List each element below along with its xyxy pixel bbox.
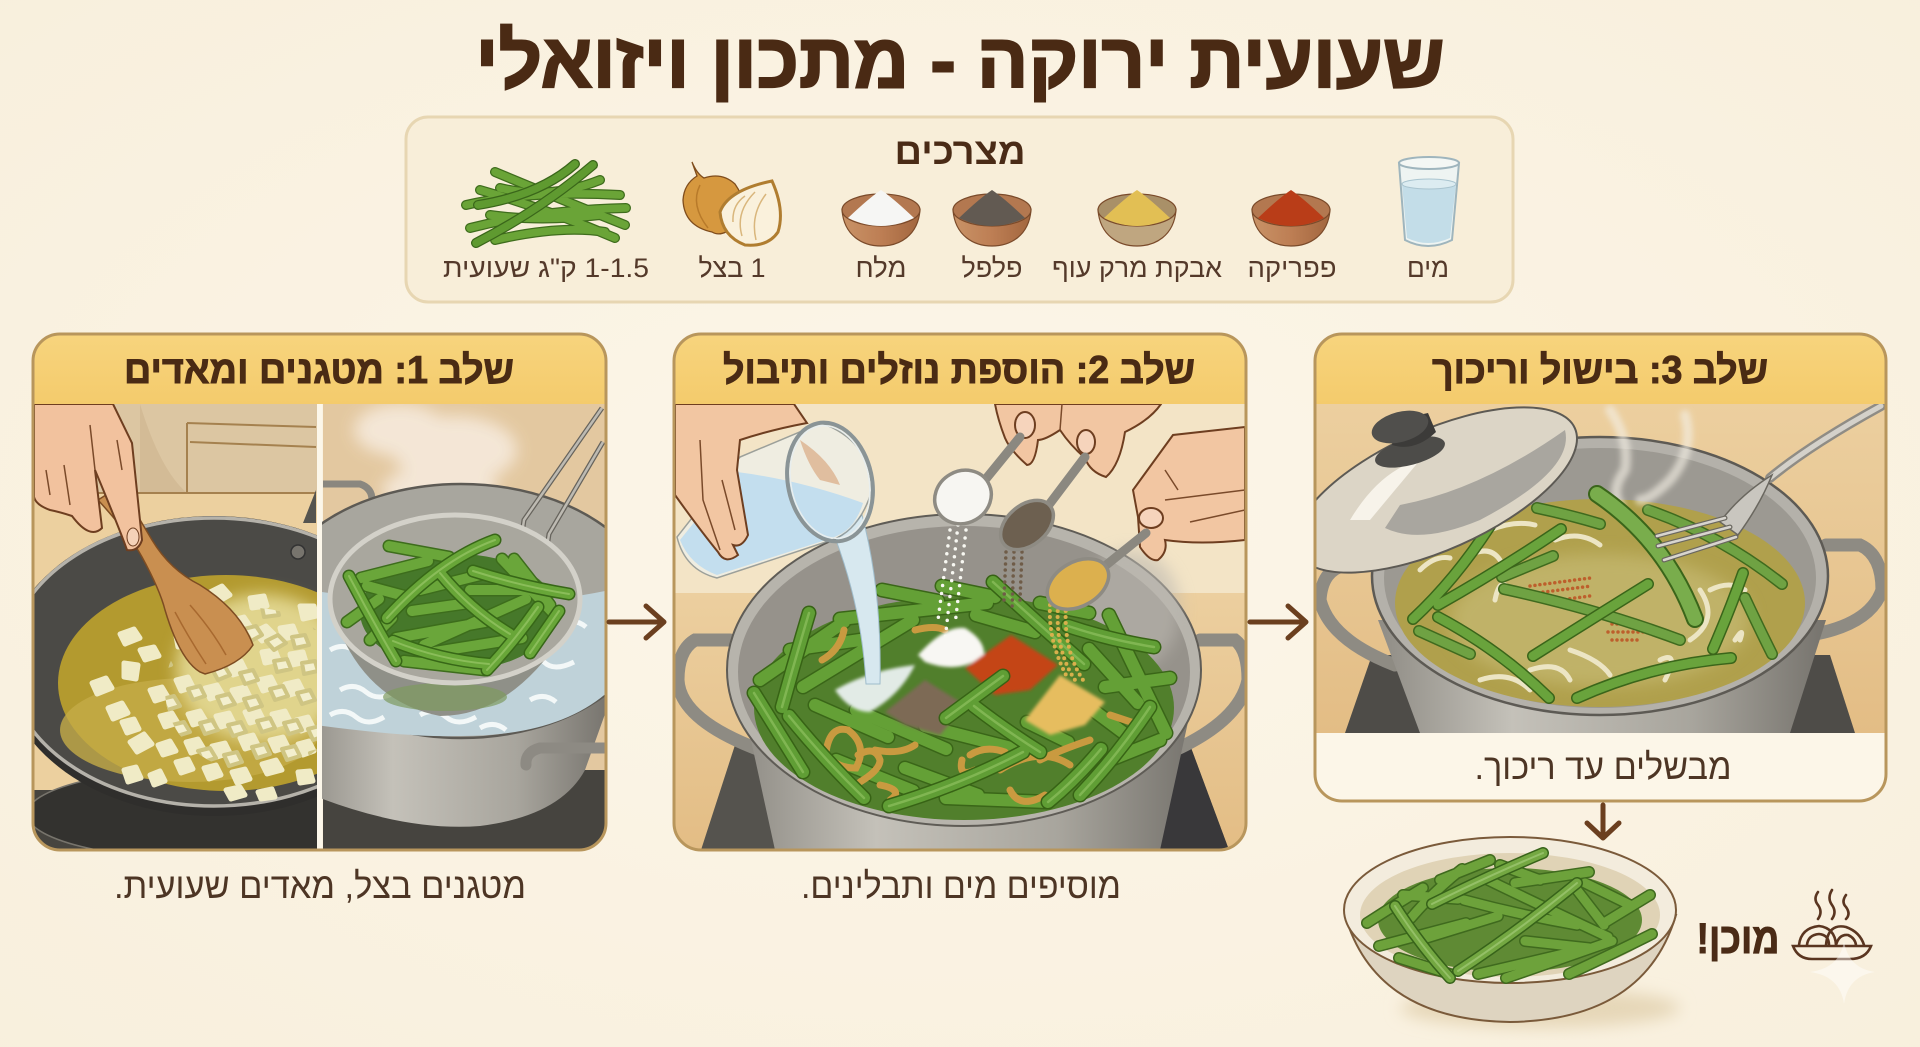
spoons	[925, 437, 1146, 620]
ingredient labels: מלח	[856, 253, 906, 283]
hand: left holding glass	[675, 404, 807, 559]
pan handle stub	[303, 490, 316, 523]
ingredient labels	[443, 253, 1449, 283]
illustration: cooking pot	[1316, 404, 1884, 733]
hand: right holding spoon	[1133, 427, 1245, 560]
denser onion cluster	[165, 608, 317, 768]
illustration: steaming beans	[322, 404, 604, 848]
step 1 border	[33, 334, 606, 850]
step 2 caption: מוסיפים מים ותבלינים.	[801, 865, 1121, 906]
ingredient: green beans	[466, 164, 626, 243]
right pot handle	[526, 748, 607, 765]
step 1 header bar	[34, 335, 605, 404]
ingredient labels: מים	[1407, 253, 1449, 283]
ingredient: paprika bowl	[1252, 190, 1330, 246]
ingredient: salt bowl	[842, 190, 920, 246]
pot handles	[1810, 545, 1882, 635]
beans upper	[754, 582, 1154, 806]
hand	[34, 404, 142, 550]
step 3 border	[1315, 334, 1886, 801]
ingredient labels: פפריקה	[1248, 253, 1336, 283]
arrow: step 2 to step 3	[1250, 606, 1306, 638]
arrow: step 3 to final dish	[1587, 805, 1619, 838]
arrow: step 1 to step 2	[609, 606, 664, 638]
noodles	[822, 628, 1140, 801]
ingredient: onion	[683, 162, 780, 245]
pot body	[1378, 620, 1826, 733]
ready label: מוכן!	[1696, 915, 1780, 963]
soup	[1395, 499, 1805, 707]
step 2 header bar	[675, 335, 1245, 404]
held bean	[1597, 494, 1695, 619]
panel: step 1	[32, 332, 608, 903]
ingredient labels: אבקת מרק עוף	[1052, 253, 1222, 283]
ingredient: chicken stock powder bowl	[1098, 190, 1176, 246]
step 2 border	[674, 334, 1246, 850]
step 3 heading: שלב 3: בישול וריכוך	[1432, 349, 1768, 392]
steam	[1610, 410, 1688, 505]
ingredients heading: מצרכים	[894, 131, 1026, 172]
watermark sparkle	[1810, 941, 1875, 1004]
lid	[1316, 406, 1578, 574]
falling spices	[938, 525, 1083, 680]
pot body	[754, 723, 1188, 848]
ingredient labels: פלפל	[962, 253, 1022, 283]
illustration: frying onion	[34, 404, 317, 848]
beans lower	[760, 586, 1170, 802]
ingredient: pepper bowl	[953, 190, 1031, 246]
final dish bowl	[1344, 837, 1680, 1028]
fork	[1657, 406, 1881, 560]
panel: ingredients	[406, 117, 1513, 302]
spice piles	[835, 628, 1105, 735]
paprika flecks	[1528, 578, 1646, 640]
split divider	[317, 766, 322, 848]
soup beans	[1413, 508, 1782, 698]
step 3 header bar	[1316, 335, 1885, 404]
ingredient: water glass	[1399, 157, 1459, 246]
wooden spatula	[98, 486, 253, 674]
ingredient labels: 1 בצל	[698, 253, 766, 283]
hands	[675, 404, 1245, 560]
ingredient labels: 1-1.5 ק"ג שעועית	[443, 253, 649, 283]
lid knob	[1375, 436, 1445, 468]
step 2 heading: שלב 2: הוספת נוזלים ותיבול	[723, 349, 1195, 392]
icon: steaming noodle plate	[1793, 890, 1871, 959]
step 3 caption: מבשלים עד ריכוך.	[1474, 746, 1732, 787]
panel: step 3	[1273, 334, 1886, 801]
noodles and onion	[1420, 523, 1745, 690]
step 1 heading: שלב 1: מטגנים ומאדים	[124, 349, 514, 392]
step 1 caption: מטגנים בצל, מאדים שעועית.	[114, 865, 526, 906]
glass and water stream	[677, 415, 884, 684]
food	[754, 596, 1174, 820]
pot handles	[678, 640, 760, 750]
strainer beans	[347, 540, 569, 670]
onion pieces	[92, 586, 317, 799]
illustration: adding liquids and seasoning	[675, 404, 1248, 850]
pot	[322, 697, 604, 827]
strainer	[330, 408, 603, 716]
title: שעועית ירוקה - מתכון ויזואלי	[476, 18, 1444, 104]
hand: centre holding two spoons	[995, 404, 1161, 477]
panel: step 2	[674, 334, 1248, 906]
